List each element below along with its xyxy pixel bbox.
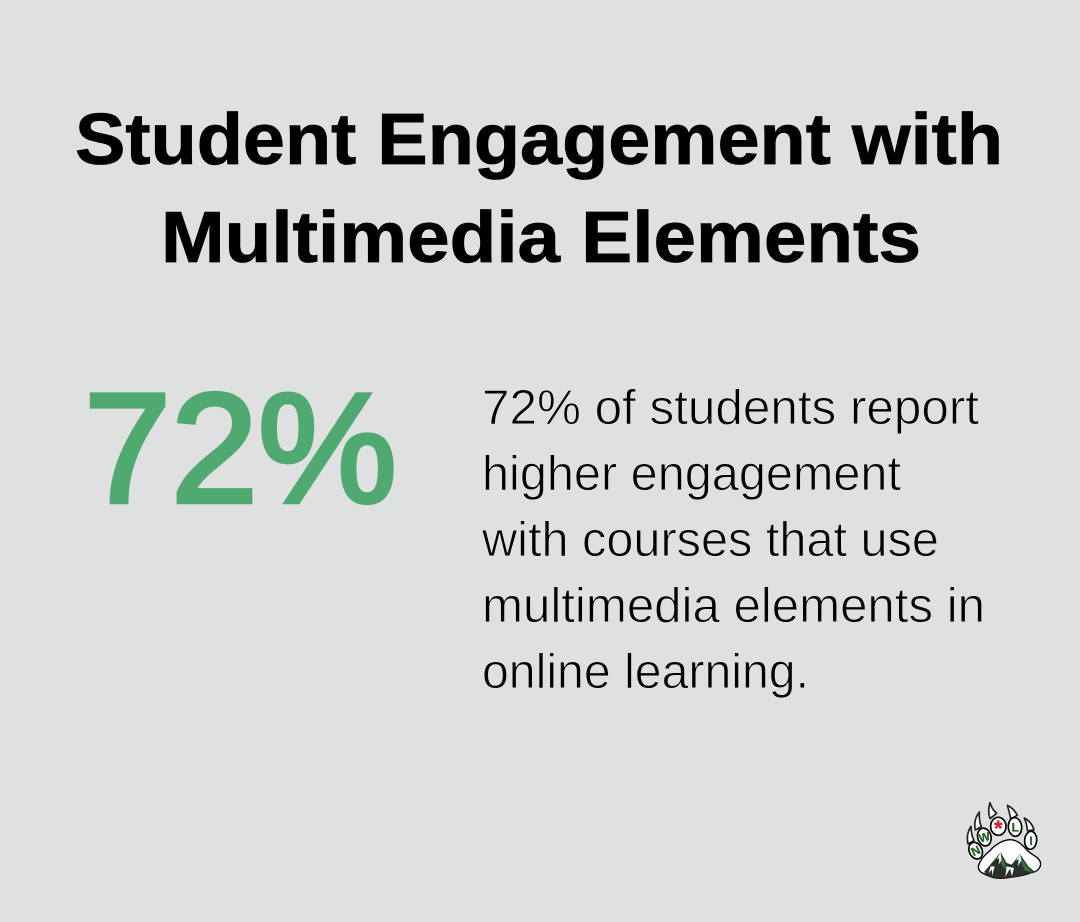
icon: bear paw logo	[966, 803, 1041, 878]
title	[75, 100, 1003, 278]
stat description text: higher engagement	[482, 447, 901, 501]
stat description text: 72% of students report	[482, 381, 979, 435]
toe pad letters	[969, 816, 1033, 859]
big stat: 72%: 72%	[84, 362, 397, 536]
toe pad letters: I	[1029, 834, 1033, 848]
toe pad letters: *	[994, 816, 1003, 841]
stat description text	[481, 381, 985, 699]
toe pad letters: N	[969, 843, 983, 859]
title: Student Engagement with	[75, 100, 1003, 180]
claws	[967, 803, 1034, 844]
stat description text: with courses that use	[481, 513, 939, 567]
stat description text: online learning.	[482, 645, 809, 699]
toe pads	[966, 817, 1037, 861]
stat description text: multimedia elements in	[482, 579, 985, 633]
palm pad	[978, 840, 1041, 878]
title: Multimedia Elements	[161, 198, 921, 278]
toe pad letters: W	[977, 829, 992, 846]
mountains	[984, 852, 1035, 878]
toe pad letters: L	[1012, 821, 1019, 835]
